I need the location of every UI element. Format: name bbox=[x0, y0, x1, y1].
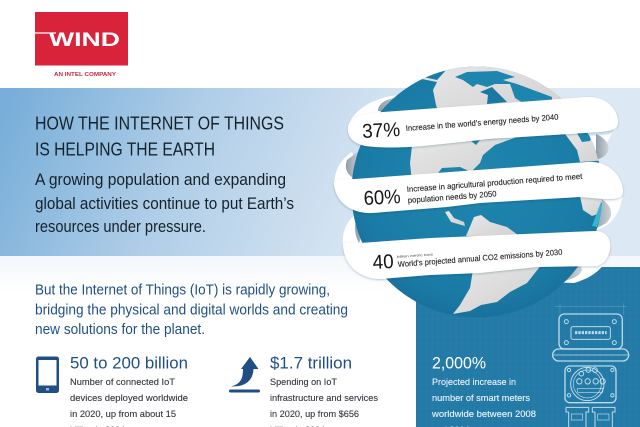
icon: rising arrow bbox=[229, 357, 260, 392]
ribbon 1: 37%: 37% bbox=[362, 119, 401, 143]
intro text: global activities continue to put Earth’s bbox=[35, 195, 294, 213]
stat: smart meters bbox=[431, 354, 536, 427]
stat: connected devices bbox=[70, 354, 188, 427]
logo: Wind, an Intel company bbox=[35, 12, 128, 78]
ribbon 2: 60%: 60% bbox=[363, 186, 401, 210]
stat: connected devices: in 2020, up from about 15 bbox=[70, 409, 176, 419]
ribbon 1: 37% bbox=[348, 97, 618, 148]
intro text: resources under pressure. bbox=[35, 218, 206, 236]
stat: smart meters: worldwide between 2008 bbox=[431, 409, 536, 419]
globe with ribbons bbox=[334, 60, 623, 318]
header gradient band bbox=[0, 88, 640, 292]
stat: IoT spending bbox=[270, 354, 379, 427]
title: HOW THE INTERNET OF THINGS bbox=[35, 114, 284, 134]
stat: connected devices: 50 to 200 billion bbox=[70, 354, 188, 372]
stat: connected devices: devices deployed worldwide bbox=[70, 393, 188, 403]
intro text bbox=[35, 171, 294, 236]
ribbon 3: 40 billion metric tons bbox=[343, 231, 610, 279]
IoT statement bbox=[35, 282, 348, 338]
logo: Wind, an Intel company: WIND bbox=[49, 29, 120, 51]
logo: Wind, an Intel company: AN INTEL COMPANY bbox=[54, 72, 117, 78]
stat: IoT spending: Spending on IoT bbox=[270, 377, 337, 387]
icon: tablet device bbox=[36, 356, 59, 393]
stat: IoT spending: infrastructure and services bbox=[270, 393, 379, 403]
ribbon 1: 37%: Increase in the world’s energy needs by 2040 bbox=[405, 113, 559, 133]
stat: smart meters: Projected increase in bbox=[432, 377, 516, 387]
ribbon back ends bbox=[334, 95, 623, 283]
ribbon 3: 40 billion metric tons: billion metric tons bbox=[397, 252, 433, 259]
IoT statement: But the Internet of Things (IoT) is rapidly growing, bbox=[35, 282, 330, 298]
title: IS HELPING THE EARTH bbox=[35, 140, 215, 160]
continents bbox=[410, 60, 610, 314]
IoT statement: new solutions for the planet. bbox=[35, 322, 205, 338]
ribbon 3: 40 billion metric tons: World’s projected annual CO2 emissions by 2030 bbox=[397, 248, 563, 269]
ribbon 2: 60% bbox=[334, 162, 623, 213]
intro text: A growing population and expanding bbox=[35, 171, 286, 189]
stat: IoT spending: $1.7 trillion bbox=[270, 354, 352, 372]
title bbox=[35, 114, 284, 160]
icon: smart meter blueprint bbox=[553, 303, 629, 427]
stat: connected devices: Number of connected IoT bbox=[70, 377, 176, 387]
globe sphere bbox=[352, 66, 602, 318]
panel: smart meters bbox=[416, 267, 640, 427]
stat: smart meters: 2,000% bbox=[432, 354, 486, 372]
IoT statement: bridging the physical and digital worlds and creating bbox=[35, 302, 348, 318]
ribbon 2: 60%: population needs by 2050 bbox=[407, 189, 497, 205]
ribbon 2: 60%: Increase in agricultural production required to meet bbox=[406, 172, 583, 194]
stat: smart meters: number of smart meters bbox=[432, 393, 531, 403]
ribbon 3: 40 billion metric tons: 40 bbox=[372, 251, 394, 274]
stat: IoT spending: in 2020, up from $656 bbox=[270, 409, 359, 419]
